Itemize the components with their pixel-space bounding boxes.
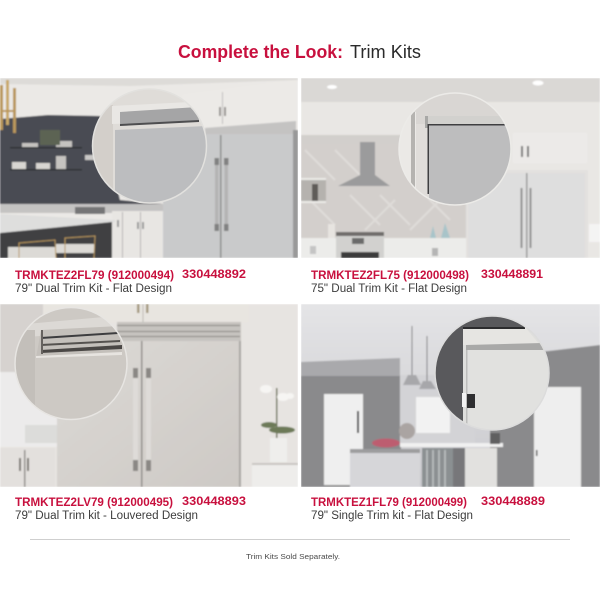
panel: 79 inch single flat trim kit photo — [301, 304, 600, 487]
stools — [8, 247, 56, 258]
caption: kit 1: TRMKTEZ2FL79 (912000494) — [15, 270, 174, 282]
caption: kit 1 — [15, 269, 246, 295]
pendant lights — [0, 85, 3, 130]
panel: 79 inch dual flat trim kit kitchen photo — [0, 78, 298, 258]
lower left cabinet — [0, 448, 55, 487]
title: Complete the Look: — [178, 42, 343, 62]
upper cabinet — [513, 133, 587, 163]
ceiling lights — [327, 85, 337, 89]
right refrigerator — [534, 387, 581, 487]
caption: kit 4 — [311, 496, 545, 522]
vases — [430, 223, 450, 238]
lower cabinets — [301, 238, 466, 258]
title — [178, 42, 421, 62]
back wall and window — [399, 376, 402, 444]
chairs — [422, 448, 453, 487]
caption: kit 1: 79" Dual Trim Kit - Flat Design — [15, 283, 172, 295]
caption: kit 3: 79" Dual Trim kit - Louvered Design — [15, 510, 198, 522]
dark tile backsplash — [0, 115, 163, 204]
caption: kit 4: 79" Single Trim kit - Flat Design — [311, 510, 473, 522]
counter — [0, 204, 163, 213]
refrigerator — [204, 120, 296, 134]
range hood — [338, 142, 390, 186]
caption: kit 4: TRMKTEZ1FL79 (912000499) — [311, 497, 467, 509]
pendant lights — [412, 326, 413, 376]
refrigerator — [57, 341, 240, 487]
caption: kit 2: TRMKTEZ2FL75 (912000498) — [311, 270, 469, 282]
marble wall — [0, 304, 43, 372]
handles — [133, 379, 138, 460]
magnifier lens: single flat trim — [435, 316, 556, 435]
footnote: Trim Kits Sold Separately. — [246, 552, 340, 561]
counter and island — [400, 443, 503, 447]
lower cabinets — [112, 210, 164, 214]
title: Trim Kits — [350, 42, 421, 62]
cabinet — [453, 448, 465, 487]
caption: kit 4: 330448889 — [481, 496, 545, 508]
side cabinet — [252, 465, 298, 487]
upper cabinet — [43, 304, 57, 314]
caption: kit 3 — [15, 496, 246, 522]
grey cabinetry — [301, 358, 400, 377]
caption: kit 2: 330448891 — [481, 269, 544, 281]
upper cabinets — [183, 80, 298, 130]
louvered trim — [117, 322, 241, 341]
orchid — [276, 388, 278, 438]
flowers — [372, 438, 400, 448]
left refrigerator — [324, 394, 363, 485]
magnifier lens: louvered trim — [15, 307, 127, 420]
caption: kit 3: 330448893 — [182, 496, 246, 508]
refrigerator — [466, 170, 588, 258]
open shelf — [301, 178, 326, 180]
panel: 75 inch dual flat trim kit kitchen photo — [301, 78, 600, 258]
marble backsplash — [301, 143, 466, 238]
caption: kit 2: 75" Dual Trim Kit - Flat Design — [311, 283, 467, 295]
magnifier lens: flat trim close-up — [398, 92, 510, 206]
range — [336, 238, 384, 258]
island — [0, 214, 115, 234]
magnifier lens: flat trim — [92, 89, 213, 209]
caption: kit 2 — [311, 269, 544, 295]
panel: 79 inch dual louvered trim kit photo — [0, 304, 298, 487]
caption: kit 1: 330448892 — [182, 269, 246, 281]
caption: kit 3: TRMKTEZ2LV79 (912000495) — [15, 497, 173, 509]
